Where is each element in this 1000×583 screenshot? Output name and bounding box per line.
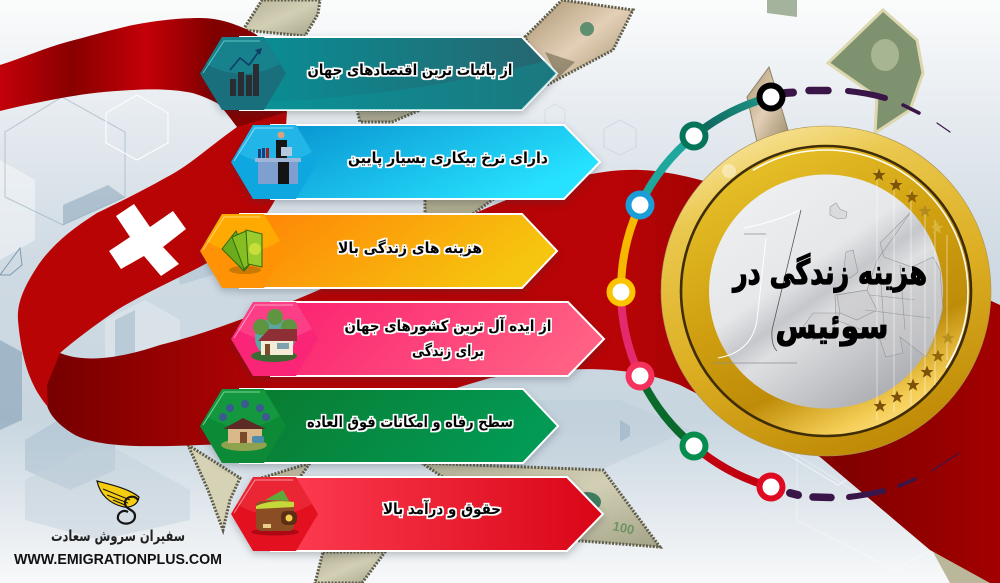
card: stable economies xyxy=(200,37,557,110)
euro coin xyxy=(661,126,991,456)
icon: house with trees xyxy=(231,302,318,376)
icon: smart house xyxy=(200,389,286,463)
card text second line: برای زندگی xyxy=(412,342,484,360)
card text: هزینه های زندگی بالا xyxy=(338,239,482,257)
banner xyxy=(271,477,603,551)
icon: office worker xyxy=(231,125,318,199)
card: welfare and facilities xyxy=(200,389,558,463)
website url: WWW.EMIGRATIONPLUS.COM xyxy=(14,551,222,568)
timeline nodes xyxy=(606,82,786,502)
icon: banknotes xyxy=(200,214,286,288)
logo mark xyxy=(97,481,139,524)
main title: سوئیس xyxy=(776,307,888,347)
banner xyxy=(271,302,604,376)
stars xyxy=(872,168,954,412)
card: low unemployment xyxy=(231,125,600,199)
icon: growth chart xyxy=(200,37,286,110)
numeral one xyxy=(713,210,801,363)
card: high cost of living xyxy=(200,214,557,288)
swiss cross xyxy=(109,204,186,276)
card text: سطح رفاه و امکانات فوق العاده xyxy=(307,413,513,431)
card text: دارای نرخ بیکاری بسیار پایین xyxy=(348,149,548,168)
main title xyxy=(732,253,927,347)
banknotes: 100 xyxy=(611,518,636,537)
card: high income xyxy=(231,477,603,551)
banner xyxy=(240,389,558,463)
icon: wallet xyxy=(231,477,318,551)
banner xyxy=(271,125,600,199)
card: ideal countries xyxy=(231,302,604,376)
main title: هزینه زندگی در xyxy=(732,253,927,293)
red ribbon: top sweep xyxy=(0,18,287,127)
light rays xyxy=(877,170,947,420)
banner xyxy=(240,214,557,288)
card text: از باثبات ترین اقتصادهای جهان xyxy=(308,61,512,79)
timeline ring xyxy=(621,97,771,487)
red ribbon: middle sweep xyxy=(18,105,287,407)
banner xyxy=(240,37,557,110)
euro map xyxy=(803,203,943,357)
logo xyxy=(14,481,222,568)
red ribbon: lower sweep crossing to the coin xyxy=(46,170,1000,583)
logo persian name: سفیران سروش سعادت xyxy=(51,527,185,545)
background hexagon pattern xyxy=(0,95,940,570)
dashed arc xyxy=(785,90,959,498)
card text: حقوق و درآمد بالا xyxy=(383,500,501,518)
card text: از ایده آل ترین کشورهای جهان xyxy=(344,317,552,335)
